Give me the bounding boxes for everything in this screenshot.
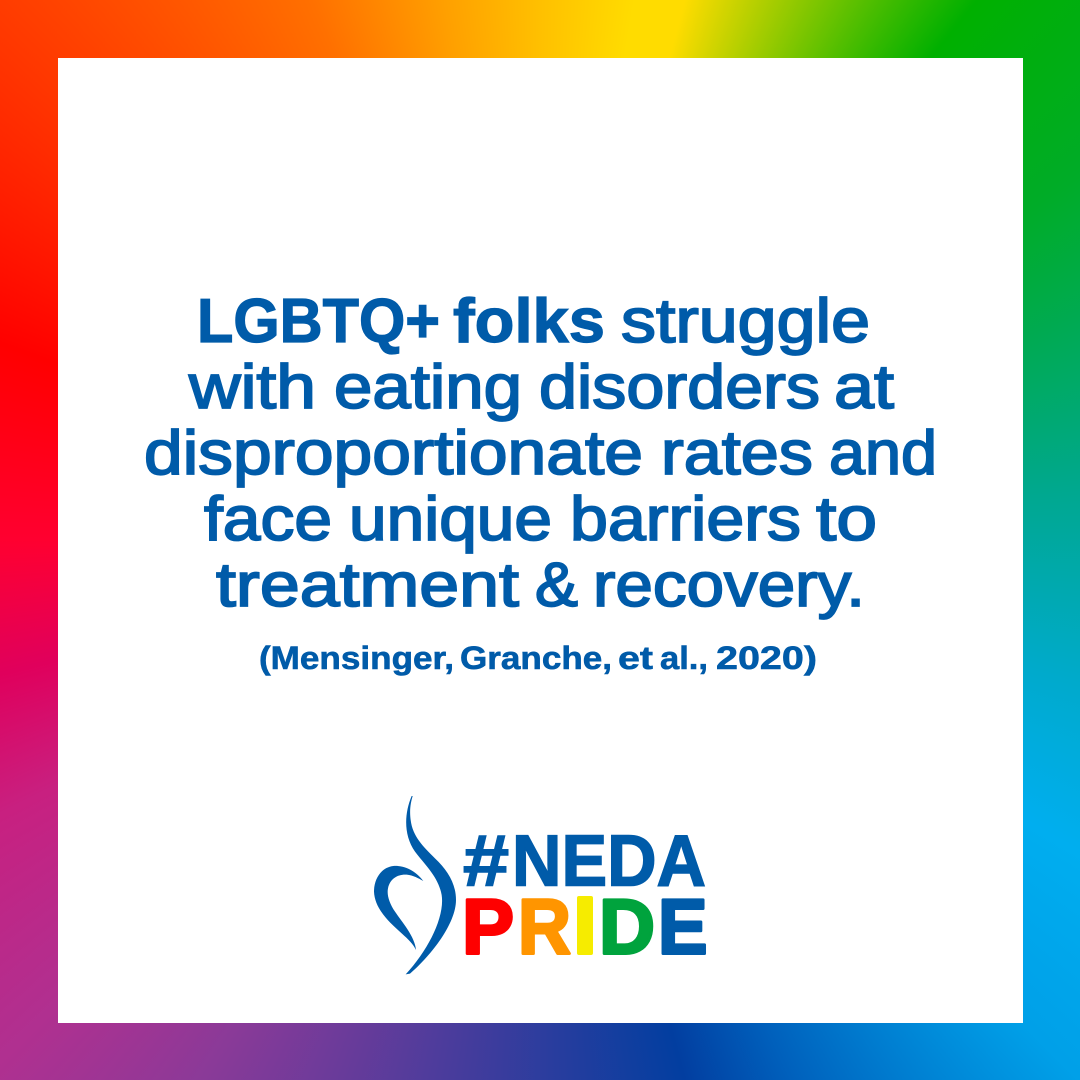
headline line 2 (188, 353, 894, 422)
citation: al., (660, 640, 708, 676)
headline line 1 bold: LGBTQ+ (197, 287, 440, 356)
white panel (58, 58, 1023, 1023)
headline line 3: disproportionate (144, 419, 643, 488)
citation (259, 640, 817, 676)
PRIDE wordmark in rainbow letters (462, 882, 708, 970)
headline line 1 regular: struggle (621, 287, 870, 356)
headline line 5: & (535, 551, 578, 620)
headline line 5: recovery. (593, 551, 865, 620)
headline line 3: rates (661, 419, 813, 488)
#NEDA wordmark: # (463, 822, 509, 902)
headline line 4: unique (349, 485, 552, 554)
headline line 2: with (188, 353, 316, 422)
headline line 1 bold: folks (453, 287, 605, 356)
letter R: R (518, 882, 571, 970)
citation: et (618, 640, 653, 676)
headline line 2: disorders (539, 353, 820, 422)
citation: 2020) (716, 640, 817, 676)
icon: NEDA flame and heart mark (374, 796, 456, 974)
headline line 4: barriers (570, 485, 801, 554)
citation: (Mensinger, (259, 640, 454, 676)
headline line 4 (204, 485, 877, 554)
letter E: E (658, 882, 708, 970)
#NEDA wordmark: NEDA (512, 822, 706, 902)
headline line 5 (216, 551, 865, 620)
headline line 5: treatment (216, 551, 519, 620)
headline line 4: face (204, 485, 332, 554)
letter I (577, 896, 593, 955)
citation: Granche, (460, 640, 612, 676)
letter P: P (462, 882, 514, 970)
headline line 1 bold (197, 287, 605, 356)
headline (144, 287, 937, 620)
headline line 4: to (816, 485, 877, 554)
letter D: D (599, 882, 655, 970)
headline line 2: at (834, 353, 894, 422)
NEDA Pride logo (374, 796, 708, 974)
headline line 3 (144, 419, 937, 488)
headline line 2: eating (334, 353, 522, 422)
headline line 3: and (829, 419, 937, 488)
